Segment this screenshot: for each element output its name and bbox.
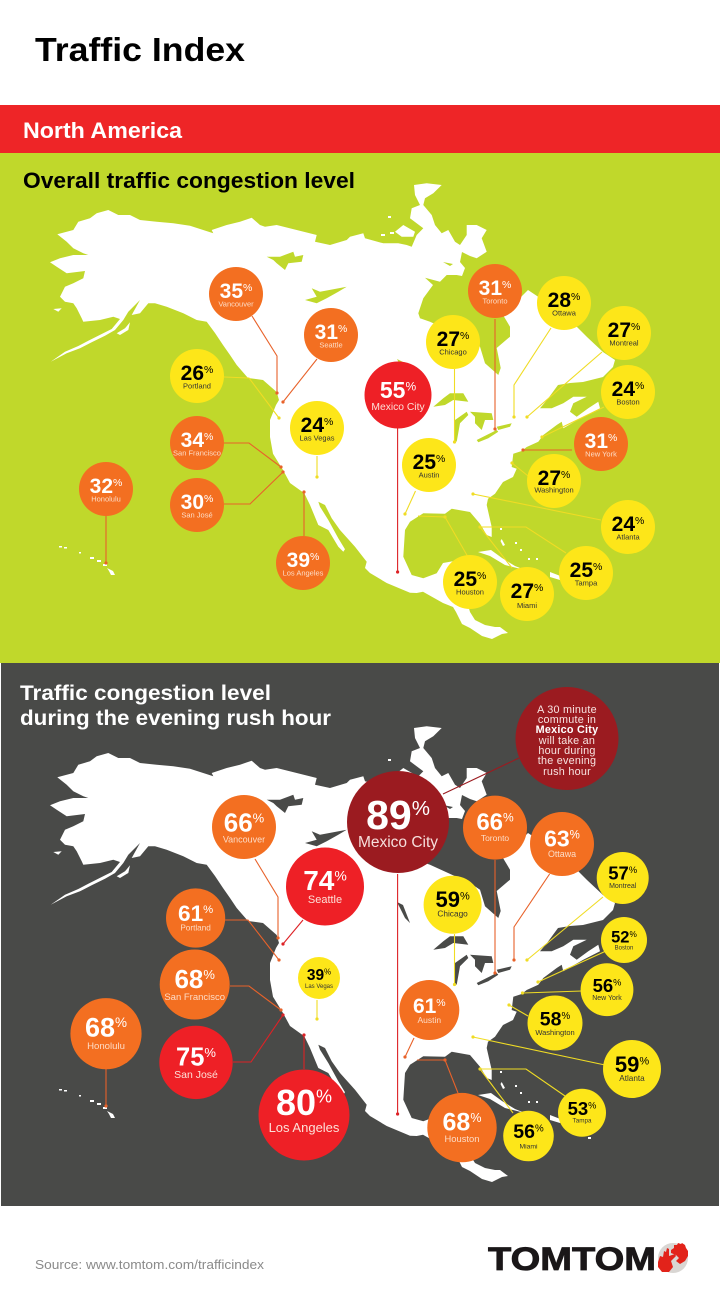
city marker: Portland 61%: Portland: [180, 924, 211, 932]
city marker: Montreal 27%: %: [631, 321, 640, 333]
city marker: Honolulu 32%: %: [113, 477, 122, 489]
heading: evening rush hour: Traffic congestion level: [20, 681, 271, 705]
city marker: Toronto 66%: [463, 796, 527, 975]
city marker: Portland 26%: 26: [181, 362, 204, 385]
city marker: Ottawa 63%: Ottawa: [548, 849, 576, 859]
city marker: Atlanta 24%: Atlanta: [616, 532, 640, 542]
city marker: Chicago 27%: [426, 315, 480, 444]
city marker: Washington 58%: %: [561, 1011, 570, 1022]
city marker: Washington 58%: [507, 996, 582, 1050]
city marker: Vancouver 66%: [212, 795, 280, 940]
city marker: Atlanta 24%: [471, 492, 655, 554]
city marker: Miami 56%: 56: [513, 1121, 535, 1143]
city marker: Chicago 59%: 59: [435, 887, 460, 912]
city marker: Ottawa 63%: [512, 812, 594, 962]
city marker: Las Vegas 39%: %: [324, 968, 331, 977]
city marker: Portland 26%: Portland: [183, 382, 211, 390]
city marker: Honolulu 68%: %: [115, 1015, 127, 1030]
city marker: Tampa 25%: %: [593, 561, 602, 573]
city marker: Portland 26%: [170, 349, 281, 420]
city marker: Los Angeles 80%: [258, 1033, 350, 1160]
callout: Mexico City commute: hour during: [538, 745, 596, 757]
city marker: San José 75%: San José: [174, 1069, 218, 1081]
city marker: Washington 58%: 58: [540, 1009, 561, 1031]
city marker: New York 56%: 56: [593, 975, 613, 996]
city marker: Chicago 27%: 27: [437, 328, 460, 351]
callout: Mexico City commute: A 30 minute: [537, 704, 597, 716]
region banner: North America: [0, 105, 720, 153]
city marker: Montreal 57%: 57: [608, 863, 629, 884]
city marker: Houston 68%: 68: [443, 1109, 470, 1137]
city marker: Tampa 53%: %: [588, 1101, 596, 1111]
city marker: Washington 27%: [510, 454, 581, 508]
city marker: Montreal 27%: Montreal: [609, 338, 639, 348]
city marker: Ottawa 28%: [512, 276, 591, 419]
city marker: Toronto 31%: %: [502, 279, 511, 291]
city marker: Vancouver 35%: Vancouver: [218, 300, 254, 308]
city marker: Honolulu 68%: 68: [85, 1012, 115, 1042]
city marker: Montreal 57%: Montreal: [609, 883, 637, 890]
city marker: New York 31%: [521, 417, 628, 471]
city marker: New York 31%: New York: [585, 450, 617, 458]
city marker: Toronto 31%: [468, 264, 522, 431]
city marker: Miami 56%: Miami: [519, 1144, 538, 1150]
city marker: Seattle 74%: Seattle: [308, 894, 342, 906]
city marker: Houston 68%: [417, 1058, 497, 1162]
city marker: Mexico City 89%: Mexico City: [358, 834, 438, 851]
city marker: Los Angeles 80%: 80: [276, 1082, 316, 1123]
icon: TomTom hands: [658, 1243, 688, 1273]
city marker: Mexico City 89%: 89: [366, 792, 412, 838]
region banner: North America: North America: [23, 118, 183, 143]
city marker: Boston 52%: %: [629, 929, 637, 939]
city marker: Atlanta 24%: 24: [612, 513, 635, 536]
city marker: Austin 61%: [399, 980, 459, 1059]
city marker: Seattle 31%: %: [338, 323, 347, 335]
city marker: Montreal 57%: %: [629, 865, 637, 875]
city marker: New York 56%: New York: [592, 995, 622, 1002]
city marker: Boston 24%: Boston: [616, 398, 640, 406]
city marker: Toronto 66%: %: [503, 811, 514, 825]
city marker: Seattle 31%: Seattle: [319, 340, 343, 350]
city marker: San José 75%: %: [204, 1045, 216, 1060]
city marker: Portland 61%: [166, 888, 281, 962]
city marker: Chicago 27%: Chicago: [439, 348, 467, 356]
city marker: Seattle 74%: 74: [303, 865, 334, 896]
city marker: Portland 61%: 61: [178, 901, 203, 926]
city marker: Los Angeles 80%: Los Angeles: [269, 1120, 340, 1135]
city marker: Seattle 31%: 31: [315, 321, 338, 344]
city marker: San Francisco 34%: San Francisco: [173, 448, 221, 458]
city marker: Las Vegas 39%: 39: [307, 967, 324, 984]
city marker: Las Vegas 39%: [298, 957, 340, 1021]
city marker: Ottawa 63%: 63: [544, 826, 570, 852]
title: Traffic Index: [35, 31, 246, 68]
city marker: Toronto 66%: 66: [476, 809, 503, 836]
city marker: Honolulu 68%: [70, 998, 142, 1108]
city marker: Honolulu 32%: 32: [90, 475, 113, 498]
city marker: San José 30%: [170, 470, 285, 532]
city marker: New York 31%: %: [608, 432, 617, 444]
city marker: New York 31%: 31: [585, 430, 608, 453]
callout: Mexico City commute: rush hour: [543, 766, 591, 778]
city marker: Ottawa 28%: Ottawa: [552, 308, 577, 318]
city marker: San Francisco 68%: %: [203, 967, 215, 982]
city marker: Las Vegas 24%: [290, 401, 344, 479]
city marker: Chicago 59%: %: [460, 890, 470, 902]
city marker: Toronto 31%: Toronto: [482, 296, 508, 306]
city marker: Boston 52%: Boston: [615, 946, 633, 952]
city marker: San Francisco 34%: [170, 416, 283, 470]
city marker: San José 30%: 30: [181, 491, 204, 514]
city marker: Ottawa 28%: 28: [548, 289, 571, 312]
city marker: Mexico City 55%: Mexico City: [371, 402, 425, 413]
city marker: Houston 68%: %: [470, 1111, 481, 1125]
city marker: Portland 61%: %: [203, 904, 213, 916]
city marker: Toronto 66%: Toronto: [481, 833, 509, 843]
city marker: Mexico City 55%: 55: [380, 377, 405, 403]
city marker: Miami 27%: [480, 527, 554, 621]
city marker: Portland 26%: %: [204, 364, 213, 376]
city marker: Houston 25%: [418, 515, 497, 609]
city marker: Austin 25%: %: [436, 453, 445, 465]
city marker: Tampa 25%: 25: [570, 559, 593, 582]
map: North America (rush hour): [50, 726, 615, 1182]
city marker: Atlanta 59%: Atlanta: [619, 1074, 645, 1083]
heading: evening rush hour: during the evening rush hour: [20, 706, 332, 730]
city marker: San Francisco 34%: %: [204, 431, 213, 443]
city marker: Vancouver 66%: %: [253, 810, 265, 826]
city marker: Honolulu 32%: [79, 462, 133, 565]
city marker: Houston 68%: Houston: [445, 1133, 479, 1144]
city marker: Boston 24%: [540, 365, 655, 439]
city marker: Austin 61%: 61: [413, 995, 436, 1018]
city marker: Ottawa 28%: %: [571, 291, 580, 303]
city marker: Tampa 53%: 53: [568, 1098, 588, 1119]
city marker: Las Vegas 24%: 24: [301, 414, 324, 437]
map: North America (overall): [50, 183, 615, 639]
city marker: Las Vegas 24%: Las Vegas: [299, 434, 335, 442]
callout: Mexico City commute: commute in: [538, 714, 596, 726]
city marker: Chicago 59%: Chicago: [437, 908, 468, 918]
city marker: San Francisco 68%: [160, 950, 283, 1020]
city marker: Honolulu 32%: Honolulu: [91, 494, 121, 504]
city marker: Atlanta 24%: %: [635, 515, 644, 527]
city marker: Honolulu 68%: Honolulu: [87, 1041, 125, 1052]
callout: Mexico City commute: the evening: [538, 755, 596, 767]
source line: Source: www.tomtom.com/trafficindex: [35, 1257, 265, 1272]
city marker: Tampa 25%: [478, 525, 613, 600]
city marker: Atlanta 59%: %: [639, 1055, 649, 1067]
city marker: Montreal 27%: [525, 306, 651, 419]
city marker: Tampa 53%: [478, 1067, 606, 1137]
city marker: Vancouver 35%: [209, 267, 279, 395]
city marker: Las Vegas 24%: %: [324, 416, 333, 428]
city marker: Miami 27%: %: [534, 582, 543, 594]
city marker: Austin 25%: [402, 438, 456, 516]
city marker: Houston 25%: %: [477, 570, 486, 582]
city marker: Atlanta 59%: 59: [615, 1052, 639, 1077]
city marker: Austin 61%: Austin: [417, 1015, 441, 1025]
heading: overall congestion: Overall traffic congestion level: [23, 168, 355, 193]
city marker: San José 75%: 75: [176, 1044, 204, 1072]
city marker: San José 30%: %: [204, 493, 213, 505]
city marker: New York 56%: %: [613, 978, 621, 988]
city marker: Atlanta 59%: [471, 1035, 661, 1098]
city marker: Tampa 53%: Tampa: [573, 1118, 592, 1124]
city marker: Los Angeles 39%: Los Angeles: [283, 568, 324, 578]
city marker: San José 75%: [159, 1013, 285, 1099]
callout: Mexico City commute: will take an: [538, 735, 595, 747]
city marker: Seattle 74%: [281, 848, 364, 946]
city marker: Houston 25%: 25: [454, 568, 477, 591]
city marker: Washington 27%: %: [561, 469, 570, 481]
panel: evening rush hour congestion: [1, 663, 719, 1206]
heading: evening rush hour: [20, 681, 332, 730]
city marker: Vancouver 66%: 66: [224, 808, 253, 838]
city marker: Vancouver 35%: %: [243, 282, 252, 294]
city marker: Washington 27%: Washington: [534, 486, 574, 494]
city marker: San José 30%: San José: [181, 510, 213, 520]
city marker: Seattle 74%: %: [334, 867, 347, 883]
city marker: Boston 52%: [536, 917, 647, 984]
city marker: Los Angeles 80%: %: [316, 1087, 332, 1107]
city marker: Ottawa 63%: %: [570, 830, 580, 842]
callout: Mexico City commute: [443, 687, 618, 794]
city marker: Montreal 27%: 27: [608, 319, 631, 342]
city marker: Boston 24%: 24: [612, 378, 635, 401]
callout: Mexico City commute: Mexico City: [536, 724, 598, 736]
city marker: Austin 25%: 25: [413, 451, 436, 474]
city marker: Montreal 57%: [525, 852, 649, 962]
city marker: Houston 25%: Houston: [456, 588, 484, 596]
city marker: Los Angeles 39%: %: [310, 551, 319, 563]
city marker: Las Vegas 39%: Las Vegas: [305, 984, 333, 990]
city marker: Mexico City 89%: %: [412, 797, 430, 820]
city marker: Miami 56%: %: [535, 1123, 544, 1134]
city marker: Mexico City 55%: [364, 362, 432, 574]
city marker: Boston 52%: 52: [611, 929, 629, 947]
city marker: Mexico City 55%: %: [405, 379, 416, 393]
logo: TomTom: TOMTOM: [488, 1241, 656, 1277]
panel: overall traffic congestion level: [0, 153, 720, 663]
city marker: Seattle 31%: [281, 308, 358, 404]
city marker: Miami 27%: Miami: [517, 601, 537, 610]
city marker: Washington 27%: 27: [538, 467, 561, 490]
city marker: Los Angeles 39%: 39: [287, 549, 310, 572]
city marker: Chicago 59%: [424, 876, 482, 986]
city marker: Boston 24%: %: [635, 380, 644, 392]
city marker: Miami 27%: 27: [511, 580, 534, 603]
city marker: Vancouver 35%: 35: [220, 280, 243, 303]
city marker: New York 56%: [521, 963, 633, 1016]
city marker: Washington 58%: Washington: [535, 1028, 575, 1037]
city marker: San Francisco 34%: 34: [181, 429, 204, 452]
city marker: Austin 25%: Austin: [419, 470, 439, 480]
city marker: Los Angeles 39%: [276, 490, 330, 590]
city marker: Tampa 25%: Tampa: [575, 578, 598, 588]
city marker: San Francisco 68%: 68: [174, 964, 203, 994]
city marker: San Francisco 68%: San Francisco: [164, 992, 225, 1003]
city marker: Toronto 31%: 31: [479, 277, 502, 300]
city marker: Vancouver 66%: Vancouver: [223, 834, 265, 844]
city marker: Chicago 27%: %: [460, 330, 469, 342]
city marker: Miami 56%: [480, 1069, 554, 1161]
city marker: Austin 61%: %: [436, 997, 446, 1009]
city marker: Mexico City 89%: [347, 771, 449, 1116]
